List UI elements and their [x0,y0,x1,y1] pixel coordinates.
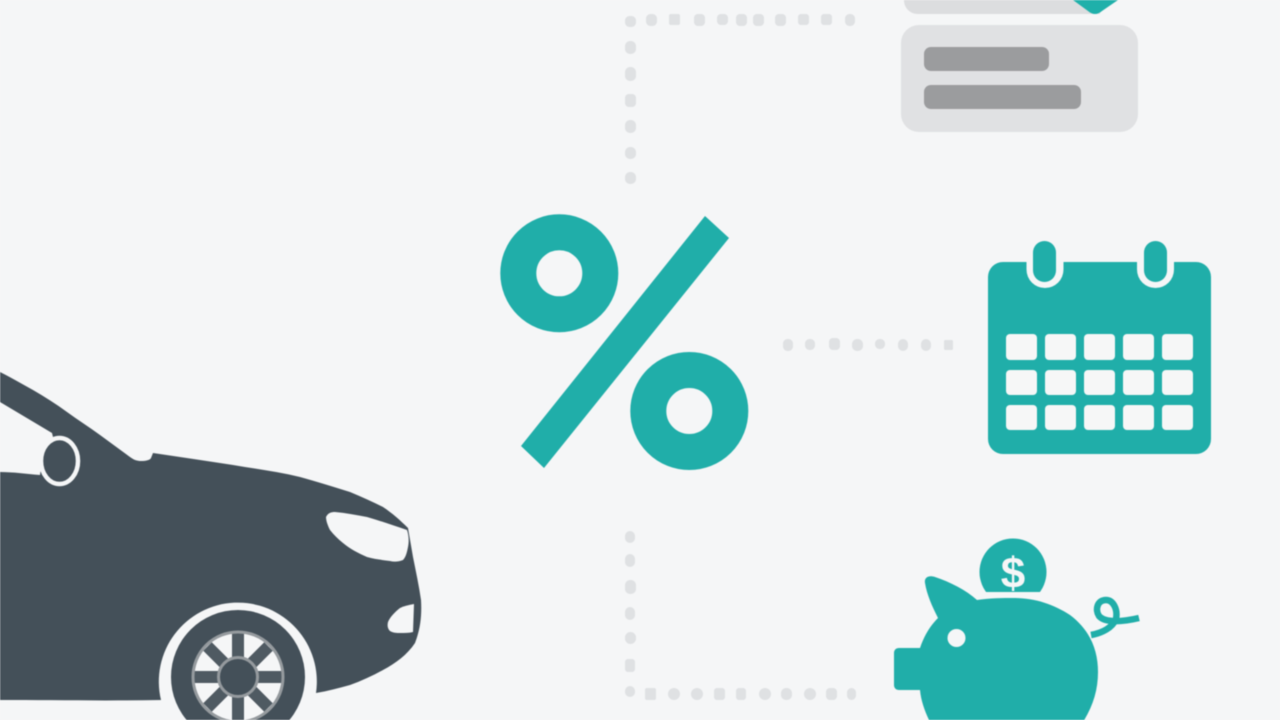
top card, cropped by the edge [904,0,1100,14]
binding ring cut-outs [1026,261,1175,289]
upper ring of percent [518,232,600,314]
car body [0,372,421,700]
dotted connector: top [625,14,855,184]
hub [218,658,258,696]
dotted connector: middle [783,338,953,351]
wing mirror [41,438,78,484]
rim [193,632,283,720]
spokes [194,633,282,720]
left binding ring [1033,241,1056,282]
short grey line [924,47,1049,71]
side window [0,402,53,475]
rim edge [193,632,283,720]
headlight [326,512,409,562]
long grey line [924,85,1081,109]
dotted connector: bottom [625,531,856,700]
tyre [171,610,305,720]
front wheel [171,610,305,720]
icon: document cards [901,0,1138,132]
icon: piggy bank [894,538,1139,720]
lower card [901,25,1138,132]
date grid [1006,334,1193,430]
coin with dollar sign [978,538,1048,593]
teal badge corner [1073,0,1118,14]
pig eye [948,629,966,647]
percent symbol [518,216,730,468]
calendar body [988,262,1211,454]
coin with dollar sign: $ [1001,549,1025,598]
pig body [894,576,1098,720]
illustration: car front [0,372,421,720]
fog light [388,604,414,633]
right binding ring [1144,241,1167,282]
pig tail [1091,600,1139,635]
icon: calendar [988,240,1211,454]
lower ring of percent [648,370,730,452]
percent slash [521,216,729,468]
